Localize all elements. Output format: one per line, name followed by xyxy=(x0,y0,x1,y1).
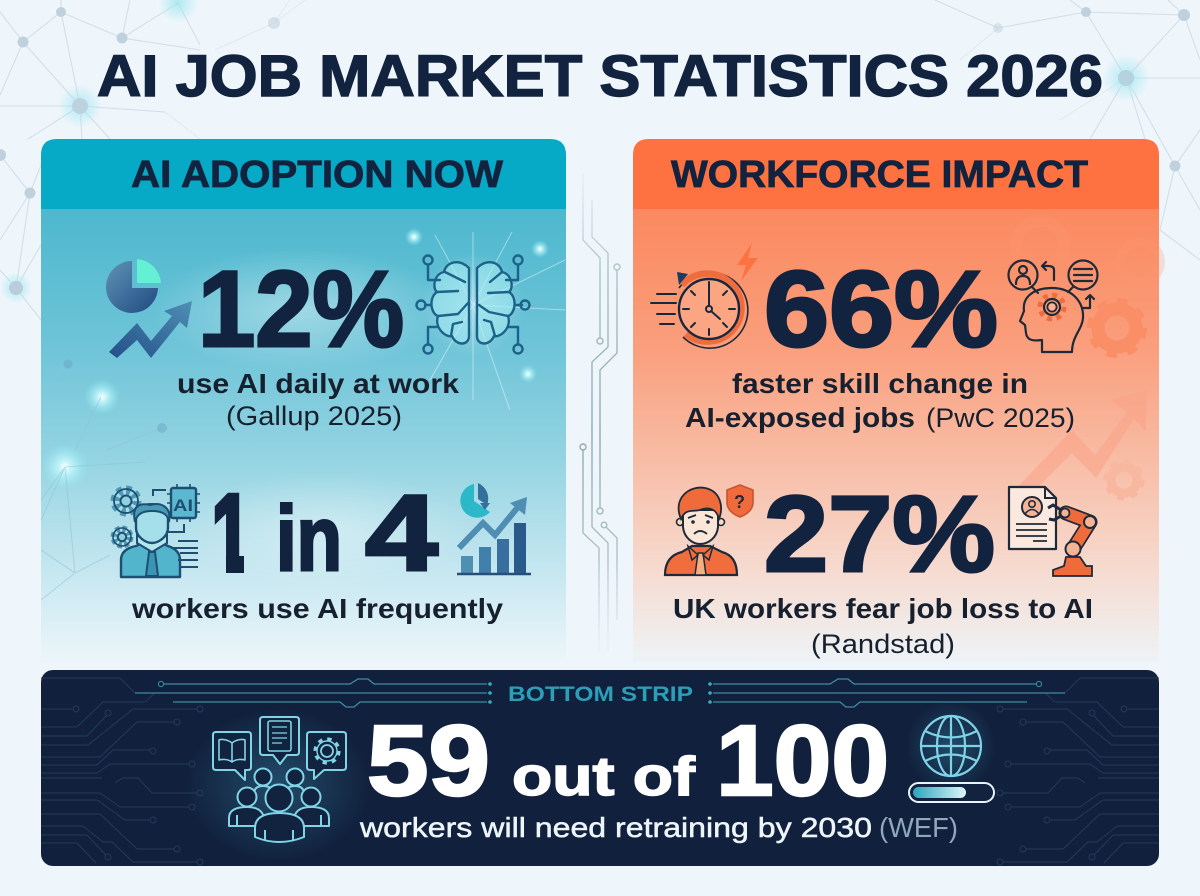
stat glow xyxy=(175,472,475,588)
decorative circuit lines xyxy=(41,678,1159,865)
strip background xyxy=(41,670,1159,866)
heading: bottom strip: BOTTOM STRIP xyxy=(508,683,693,706)
icon: globe and progress bar xyxy=(906,701,996,802)
decorative panel network xyxy=(41,228,549,600)
label: faster skill change in: faster skill change in xyxy=(732,368,1028,399)
stat: 59: 59 xyxy=(367,705,490,817)
icon: head with gear and options xyxy=(1008,260,1098,352)
stat: 1 in 4 xyxy=(214,492,440,573)
icon: AI brain xyxy=(416,232,565,410)
icon: learners with speech bubbles xyxy=(186,709,370,861)
stat: out of: out of xyxy=(512,745,696,807)
stat: 100: 100 xyxy=(716,705,889,817)
central circuit connector xyxy=(580,173,620,652)
stat: 1 in 4: 1 xyxy=(212,472,250,593)
decorative gears and arrow xyxy=(1010,221,1160,498)
title: AI JOB MARKET STATISTICS 2026 xyxy=(97,44,1103,109)
icon: pie and rising arrow xyxy=(106,259,192,358)
stat glow xyxy=(150,248,450,372)
panel background xyxy=(41,209,566,662)
stat: 27%: 27% xyxy=(764,473,995,594)
panel header xyxy=(633,139,1159,209)
source: Gallup 2025: (Gallup 2025) xyxy=(226,401,402,431)
heading: AI adoption now: AI ADOPTION NOW xyxy=(131,154,503,196)
icon: worried worker xyxy=(665,485,753,575)
icon: worker with AI chip xyxy=(113,484,200,577)
label: AI-exposed jobs: AI-exposed jobs xyxy=(685,402,915,433)
source: WEF: (WEF) xyxy=(879,812,958,843)
icon: growth bar chart xyxy=(457,483,531,574)
panel background xyxy=(633,209,1159,662)
label: use AI daily at work: use AI daily at work xyxy=(177,368,459,399)
panel: workforce impact xyxy=(633,139,1160,662)
stat: 12%: 12% xyxy=(198,248,404,369)
label: workers will need retraining by 2030: workers will need retraining by 2030 xyxy=(359,812,872,843)
stat: 1 in 4: 4 xyxy=(365,472,438,593)
panel: bottom strip xyxy=(41,670,1159,866)
stat: 1 in 4: in xyxy=(276,488,342,590)
icon: fast clock xyxy=(651,243,758,348)
panel: AI adoption now xyxy=(41,139,566,662)
label: UK workers fear job loss to AI: UK workers fear job loss to AI xyxy=(673,593,1093,624)
icon: worried worker: ? xyxy=(734,492,745,512)
source: Randstad: (Randstad) xyxy=(811,629,955,659)
source: PwC 2025: (PwC 2025) xyxy=(926,403,1075,433)
label: workers use AI frequently: workers use AI frequently xyxy=(131,593,503,624)
panel header xyxy=(41,139,566,209)
stat: 66%: 66% xyxy=(764,248,998,369)
heading: workforce impact: WORKFORCE IMPACT xyxy=(671,154,1088,196)
icon: worker with AI chip: AI xyxy=(173,496,193,515)
icon: resume and robot arm xyxy=(1009,487,1096,576)
